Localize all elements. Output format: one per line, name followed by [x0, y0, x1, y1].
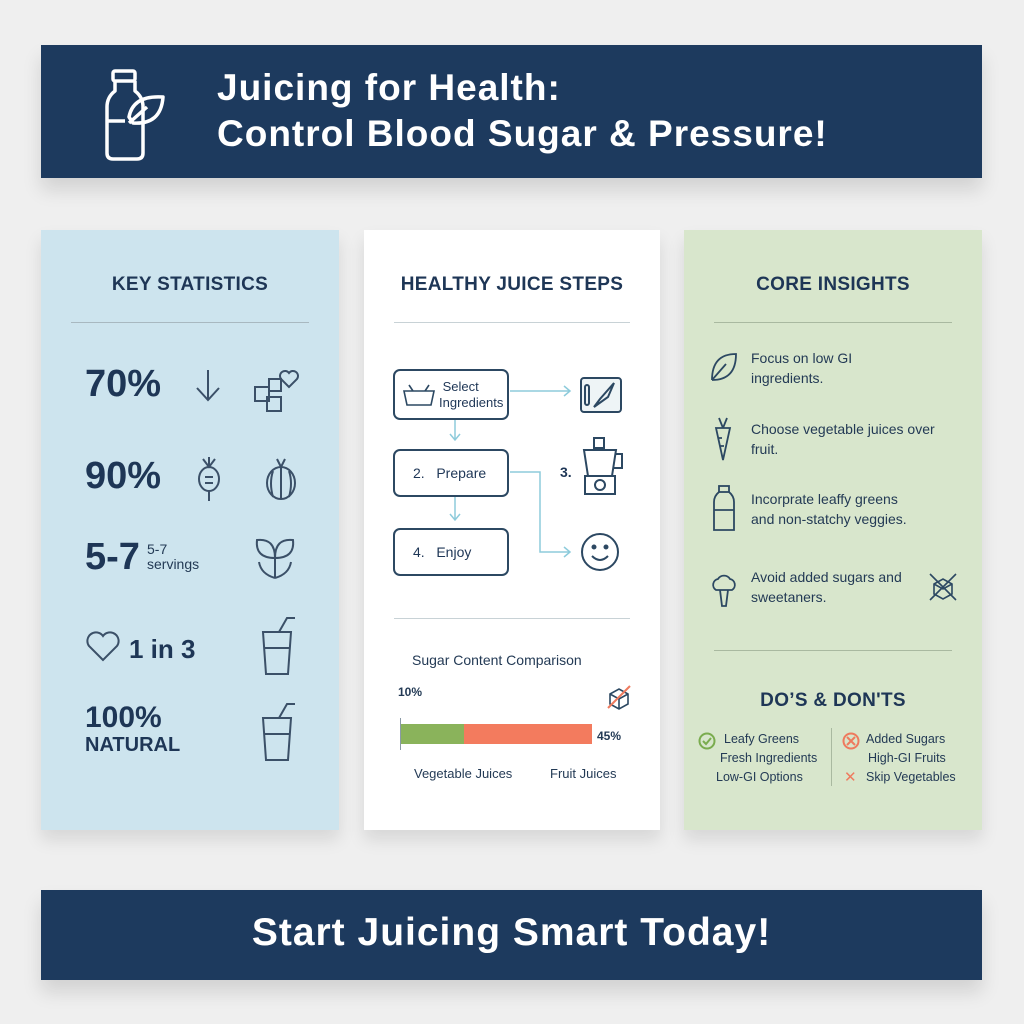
step 2 box	[393, 449, 509, 497]
step 1 box: Select	[443, 378, 479, 394]
title: Juicing for Health:	[217, 67, 561, 108]
insight 3: and non-statchy veggies.	[751, 511, 907, 527]
insight 4: Avoid added sugars and	[751, 569, 902, 585]
insight 1: Focus on low GI	[751, 350, 852, 366]
don'ts list	[842, 732, 956, 786]
heading: CORE INSIGHTS	[756, 274, 910, 295]
panel: healthy juice steps	[364, 230, 660, 830]
insight 3: Incorprate leaffy greens	[751, 491, 898, 507]
icon: smiley	[581, 533, 619, 571]
bar chart: sugar content: Fruit Juices	[550, 766, 616, 781]
stat 100% natural: NATURAL	[85, 734, 180, 756]
stat 100% natural: 100%	[85, 701, 162, 734]
bar chart: sugar content	[398, 652, 631, 781]
bar chart: sugar content: Sugar Content Comparison	[412, 652, 582, 668]
do's list: Low-GI Options	[716, 770, 803, 784]
stat 90%: 90%	[85, 455, 161, 497]
insight 4: sweetaners.	[751, 589, 826, 605]
stat 70%	[85, 363, 299, 412]
stat 5-7 servings: 5-7	[147, 541, 167, 557]
do's list	[698, 732, 817, 784]
insight 2: Choose vegetable juices over	[751, 421, 935, 437]
insight 3	[713, 485, 907, 531]
heading: KEY STATISTICS	[112, 274, 268, 295]
insight 1	[711, 350, 852, 386]
do's list: Leafy Greens	[724, 732, 799, 746]
step 1 box	[393, 369, 509, 420]
bar chart: sugar content: 45%	[597, 729, 621, 743]
insight 2: fruit.	[751, 441, 778, 457]
footer text: Start Juicing Smart Today!	[252, 911, 771, 954]
insight 1: ingredients.	[751, 370, 823, 386]
heading: do's and don'ts: DO’S & DON'TS	[760, 690, 906, 711]
title: Control Blood Sugar & Pressure!	[217, 113, 828, 154]
stat 70%: 70%	[85, 363, 161, 405]
footer banner	[41, 890, 982, 980]
stat 5-7 servings	[85, 536, 294, 579]
icon: cutting board	[580, 377, 622, 413]
stat 5-7 servings: servings	[147, 556, 199, 572]
step 2 box: 2. Prepare	[413, 465, 486, 481]
panel: core insights	[684, 230, 982, 830]
insight 4	[712, 569, 956, 607]
step 4 box	[393, 528, 509, 576]
don'ts list: Skip Vegetables	[866, 770, 956, 784]
bar chart: sugar content: 10%	[398, 685, 422, 699]
heading: HEALTHY JUICE STEPS	[401, 274, 623, 295]
insight 2	[714, 418, 935, 460]
stat 5-7 servings: 5-7	[85, 536, 140, 578]
don'ts list: Added Sugars	[866, 732, 945, 746]
icon: bottle with leaf	[105, 69, 165, 161]
stat 90%	[85, 455, 296, 501]
stat 1 in 3: 1 in 3	[129, 634, 195, 664]
stat 100% natural	[85, 701, 295, 761]
don'ts list: High-GI Fruits	[868, 751, 946, 765]
stat 1 in 3	[86, 617, 295, 675]
title	[217, 67, 828, 154]
flow diagram	[450, 386, 571, 558]
panel: key statistics	[41, 230, 339, 830]
step 1 box: Ingredients	[439, 394, 503, 410]
don'ts list: ✕	[844, 769, 857, 786]
step 4 box: 4. Enjoy	[413, 544, 471, 560]
bar chart: sugar content: Vegetable Juices	[414, 766, 512, 781]
do's list: Fresh Ingredients	[720, 751, 817, 765]
header banner	[41, 45, 982, 178]
step 3 label + blender: 3.	[560, 464, 572, 480]
